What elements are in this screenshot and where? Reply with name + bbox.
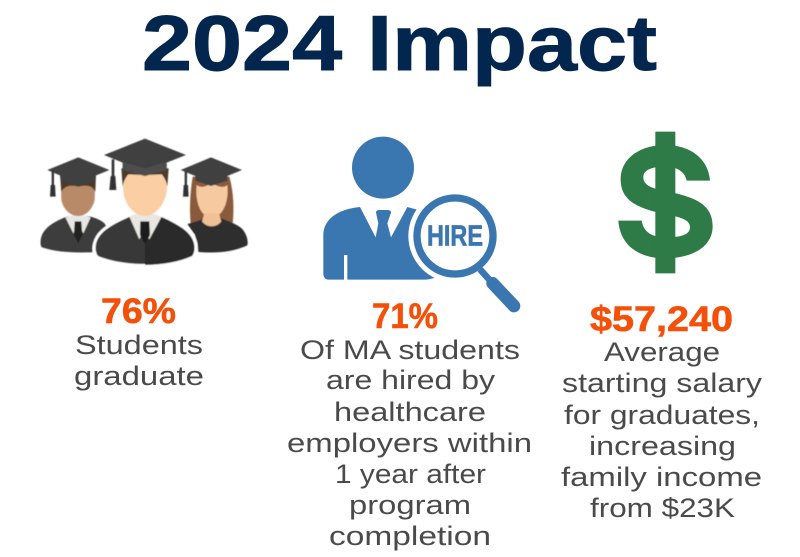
- icon: graduates: [40, 139, 248, 267]
- text: hired description: completion: [329, 521, 491, 551]
- text: salary description: from $23K: [590, 493, 735, 523]
- text: hired description: are hired by: [326, 365, 496, 395]
- text: hired description: employers within: [287, 428, 532, 458]
- text: students graduate: Students: [75, 330, 203, 360]
- panel: graduation: [40, 139, 248, 391]
- icon: person with HIRE magnifier: HIRE: [427, 221, 483, 253]
- text: hired description: [287, 335, 532, 551]
- text: salary description: for graduates,: [564, 400, 760, 430]
- text: salary description: [561, 337, 763, 523]
- panel: salary: [561, 132, 763, 523]
- stat: $57,240: $57,240: [590, 300, 733, 339]
- text: hired description: Of MA students: [300, 335, 520, 365]
- text: salary description: Average: [604, 337, 720, 367]
- text: salary description: family income: [561, 462, 762, 492]
- text: salary description: starting salary: [562, 368, 763, 398]
- icon: person with HIRE magnifier: [323, 137, 514, 306]
- stat: 76%: 76%: [101, 292, 176, 331]
- text: students graduate: [74, 330, 204, 391]
- panel: hiring: [287, 137, 532, 551]
- text: students graduate: graduate: [74, 361, 204, 391]
- icon: dollar sign: [618, 132, 713, 273]
- text: salary description: increasing: [589, 431, 736, 461]
- text: hired description: healthcare: [334, 397, 486, 427]
- title: 2024 Impact: [142, 0, 657, 87]
- text: hired description: 1 year after: [335, 459, 486, 489]
- text: hired description: program: [349, 490, 471, 520]
- stat: 71%: 71%: [372, 297, 438, 336]
